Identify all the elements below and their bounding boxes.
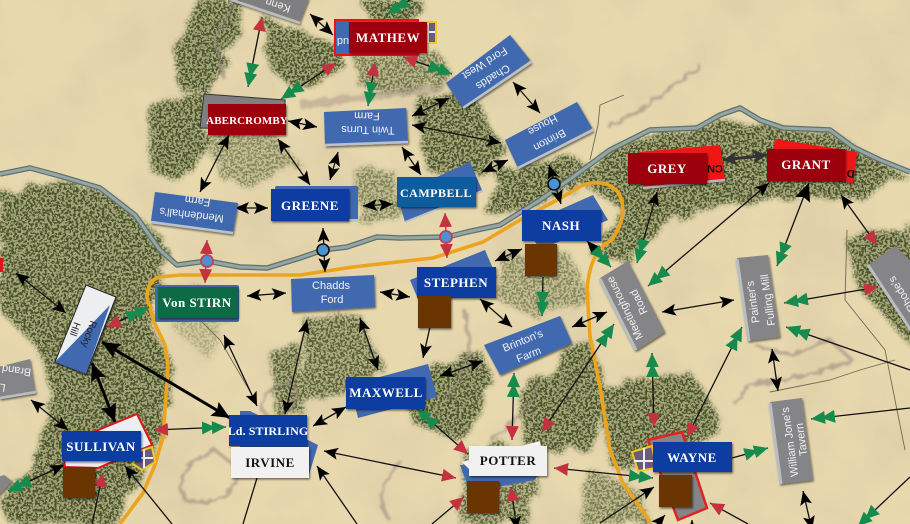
block: Twin Turns Farm: Farm: [354, 109, 380, 122]
arrow: Greene to Chadds Ford: [323, 228, 325, 272]
arrow: Maxwell to Stirling: [313, 407, 346, 426]
ford: Brinton middle: [440, 231, 452, 243]
unit: Greene: GREENE: [281, 198, 339, 213]
unit: Grant: GRANT: [781, 157, 831, 172]
arrow: Potter south west: [432, 497, 464, 524]
marker: brown square: [525, 244, 557, 276]
arrow: Tavern east: [811, 408, 910, 419]
arrow: Meetinghouse Road to Painter's Mill: [662, 300, 734, 312]
block: Meetinghouse Road: Road: [628, 287, 650, 316]
block: Rocky Hill: Rocky: [78, 319, 98, 349]
arrow: Wayne block south east: [710, 503, 748, 524]
arrow: Campbell to Stephen: [445, 213, 447, 258]
arrow: Potter to Wayne: [554, 468, 653, 478]
arrow: Wayne south: [650, 515, 665, 524]
flag: Wayne: [632, 446, 656, 471]
arrow: Sullivan south west: [8, 465, 64, 491]
arrow: Sullivan south east: [125, 466, 172, 524]
arrow: Painter's Mill to Tavern: [772, 349, 778, 391]
arrow: Grant to Rhode's: [841, 195, 877, 245]
arrow: Chadds Ford West to Brinton House: [513, 82, 540, 113]
unit: Stirling and Irvine: [228, 411, 318, 478]
arrow: Twin Turns to Brinton House: [412, 125, 501, 143]
arrow: Irvine south: [243, 478, 257, 524]
unit: Grant: [767, 139, 857, 183]
arrow: Kennett to Mathew: [310, 14, 333, 35]
block: William Jone's Tavern: Tavern: [794, 422, 810, 457]
block: Painter's Fulling Mill: Fulling Mill: [759, 273, 778, 326]
arrow: Rocky Hill to Von Stirn: [107, 307, 149, 327]
unit: Nash: [522, 195, 608, 276]
arrow: Abercromby to Twin Turns: [288, 121, 317, 127]
block: south west corner: [0, 475, 12, 496]
arrow: Mathew north: [387, 0, 410, 14]
arrow: Twin Turns to Greene: [330, 152, 338, 180]
streams: [170, 95, 905, 450]
block: Mendenhall's Farm: Farm: [184, 193, 211, 208]
block: Painter's Fulling Mill: [737, 255, 780, 341]
block: Brinton House: Brinton: [531, 126, 568, 153]
unit: Von Stirn: [155, 285, 239, 322]
unit: Stirling and Irvine: IRVINE: [245, 455, 295, 470]
unit: Stephen: [410, 250, 497, 328]
unit: Maxwell: [346, 364, 437, 418]
arrow: Potter to Maxwell: [417, 409, 468, 454]
arrow: Sullivan south: [92, 473, 103, 524]
arrow: Mendenhall to Von Stirn: [205, 240, 207, 283]
ford: Jones Ford: [201, 255, 213, 267]
ford: Chadds: [317, 244, 329, 256]
block: top left red fragment: [0, 258, 3, 272]
unit: Potter: [460, 441, 547, 513]
arrow: Abercromby to Mendenhall: [200, 135, 229, 192]
arrow: Rocky Hill to Sullivan: [92, 363, 115, 422]
arrow: Chadds Ford to Maxwell: [360, 318, 378, 370]
block: Rocky Hill: Hill: [67, 320, 82, 337]
block: Brandywine: Brand: [1, 362, 32, 378]
arrow: Nash to Meetinghouse Road: [587, 241, 611, 267]
block: Meetinghouse Road: Meetinghouse: [605, 274, 646, 342]
block: Brinton House: [505, 102, 593, 168]
ford markers: [201, 178, 560, 267]
marker: brown square: [659, 475, 692, 507]
block: Twin Turns Farm: Twin Turns: [341, 123, 395, 136]
arrow: Stephen to Maxwell: [423, 327, 430, 358]
arrow: Wayne to Painter's Mill: [687, 327, 742, 437]
arrow: Potter south: [511, 487, 517, 524]
arrow: Painter's Mill east: [786, 327, 910, 370]
unit: Stirling and Irvine: Ld. STIRLING: [228, 424, 308, 438]
block: Painter's Fulling Mill: Painter's: [745, 280, 762, 324]
arrow: Wayne to William Jone's Tavern: [732, 448, 768, 458]
arrow: Brandywine to Sullivan: [31, 400, 68, 430]
unit: Campbell: CAMPBELL: [400, 186, 472, 200]
arrow: Stephen to Brinton's Farm: [480, 299, 512, 327]
block: Meetinghouse Road: [600, 261, 665, 350]
arrow: Mendenhall to Greene: [235, 207, 268, 209]
arrow: Mathew to Twin Turns: [368, 62, 375, 106]
arrow: Nash to Brinton's Farm: [542, 277, 543, 316]
river highlight: [0, 108, 910, 268]
block: Chadds Ford West: [446, 35, 531, 108]
arrow: Kennett to Abercromby: [248, 17, 262, 87]
arrow: Wayne south west: [600, 487, 654, 523]
arrow: Rocky Hill to north west: [16, 273, 66, 313]
unit: Grant: D: [846, 167, 855, 179]
arrow: Chadds Ford to Stirling: [285, 320, 307, 414]
unit: Sullivan: [62, 414, 155, 498]
flag: Mathew: [421, 22, 436, 43]
block: Mendenhall's Farm: [151, 192, 238, 233]
block: Chadds Ford West: Chadds: [473, 61, 512, 92]
arrow: Potter to Meetinghouse Road: [542, 324, 614, 432]
arrow: Chadds Ford to Stephen: [380, 292, 410, 297]
unit: Greene: [271, 186, 358, 222]
unit: Campbell: [397, 162, 483, 222]
unit: Abercromby: [200, 94, 288, 135]
unit: Von Stirn: Von STIRN: [162, 295, 232, 310]
block: Rhode's: [868, 246, 910, 332]
unit: Abercromby: ABERCROMBY: [206, 115, 288, 127]
arrow: Twin Turns to Chadds Ford West: [412, 98, 449, 116]
block: William Jone's Tavern: [770, 398, 813, 484]
arrow: Von Stirn to Stirling: [224, 335, 257, 406]
arrow: Grey to Grant: [723, 155, 767, 160]
arrow: Potter to Brinton's Farm: [512, 373, 514, 440]
arrow: Maxwell to Brinton's Farm: [440, 361, 483, 376]
arrow: Irvine to Potter: [324, 451, 456, 478]
unit: Grey: CN: [707, 162, 723, 174]
arrow: Sullivan to Stirling: [154, 427, 226, 430]
arrow: Tavern south: [803, 491, 812, 524]
arrow: Campbell to Brinton House: [482, 160, 508, 172]
unit: Mathew: [335, 20, 436, 55]
block: Chadds Ford West: Ford West: [460, 44, 509, 81]
block: Chadds Ford: [291, 275, 375, 312]
block: Brinton House: House: [526, 112, 559, 137]
arrow: Von Stirn to Chadds Ford: [247, 293, 286, 296]
arrow: south east green: [858, 477, 910, 524]
arrow: Abercromby to Greene: [278, 139, 310, 185]
block: Brinton's Farm: Farm: [515, 345, 543, 366]
arrow: Wayne to Meetinghouse Road: [652, 353, 654, 427]
block: Brinton's Farm: [484, 316, 572, 375]
block: Kennett: [232, 0, 309, 23]
arrow: Stephen to Nash: [495, 249, 522, 261]
block: Twin Turns Farm: [324, 108, 408, 145]
block: Chadds Ford: Ford: [321, 294, 343, 306]
unit: Stephen: STEPHEN: [424, 275, 488, 290]
block: Mendenhall's Farm: Mendenhall's: [158, 205, 224, 224]
marker: brown square: [418, 296, 451, 328]
arrow: Irvine south east: [317, 466, 357, 524]
arrow: Brinton House to Nash: [549, 165, 561, 204]
block: William Jone's Tavern: William Jone's: [780, 406, 801, 477]
arrow: Mathew to Chadds Ford West: [403, 57, 452, 74]
unit: Grey: GREY: [647, 161, 687, 176]
arrow: Grant to Painter's Mill: [777, 183, 809, 266]
arrow: Grant to Meetinghouse Road: [648, 183, 769, 286]
block: Chadds Ford: Chadds: [312, 280, 350, 292]
ford: Brinton: [548, 178, 560, 190]
orange boundary line: [120, 183, 650, 524]
unit: Potter: POTTER: [480, 453, 536, 468]
unit: Mathew: ud: [337, 35, 349, 47]
arrow: Wayne south east: [691, 520, 693, 524]
arrow: Rocky Hill to Stirling: [102, 342, 230, 418]
arrow: Brinton's Farm to Meetinghouse Road: [572, 312, 607, 327]
unit: Mathew: MATHEW: [356, 30, 420, 45]
arrow: Mathew to Abercromby: [281, 63, 336, 99]
arrow: Painter's Mill to Rhode's: [784, 287, 878, 303]
hill ridges: [181, 0, 852, 520]
arrow: Grey to Meetinghouse Road: [637, 192, 657, 263]
marker: brown square: [467, 481, 499, 513]
arrow: Twin Turns to Campbell: [402, 147, 421, 175]
unit: Nash: NASH: [542, 218, 580, 233]
block: Rocky Hill: [55, 285, 116, 374]
marker: brown square: [63, 467, 95, 498]
unit: Grey: [628, 145, 725, 188]
arrow: Greene to Campbell: [363, 204, 393, 206]
block: Brinton's Farm: Brinton's: [501, 328, 545, 355]
unit: Wayne: WAYNE: [667, 450, 717, 465]
flag: Sullivan: [133, 447, 155, 470]
block: Brandywine: [0, 359, 36, 398]
unit: Wayne: [632, 432, 732, 520]
river: [0, 108, 910, 268]
unit: Maxwell: MAXWELL: [349, 385, 423, 400]
unit: Sullivan: SULLIVAN: [66, 439, 136, 454]
